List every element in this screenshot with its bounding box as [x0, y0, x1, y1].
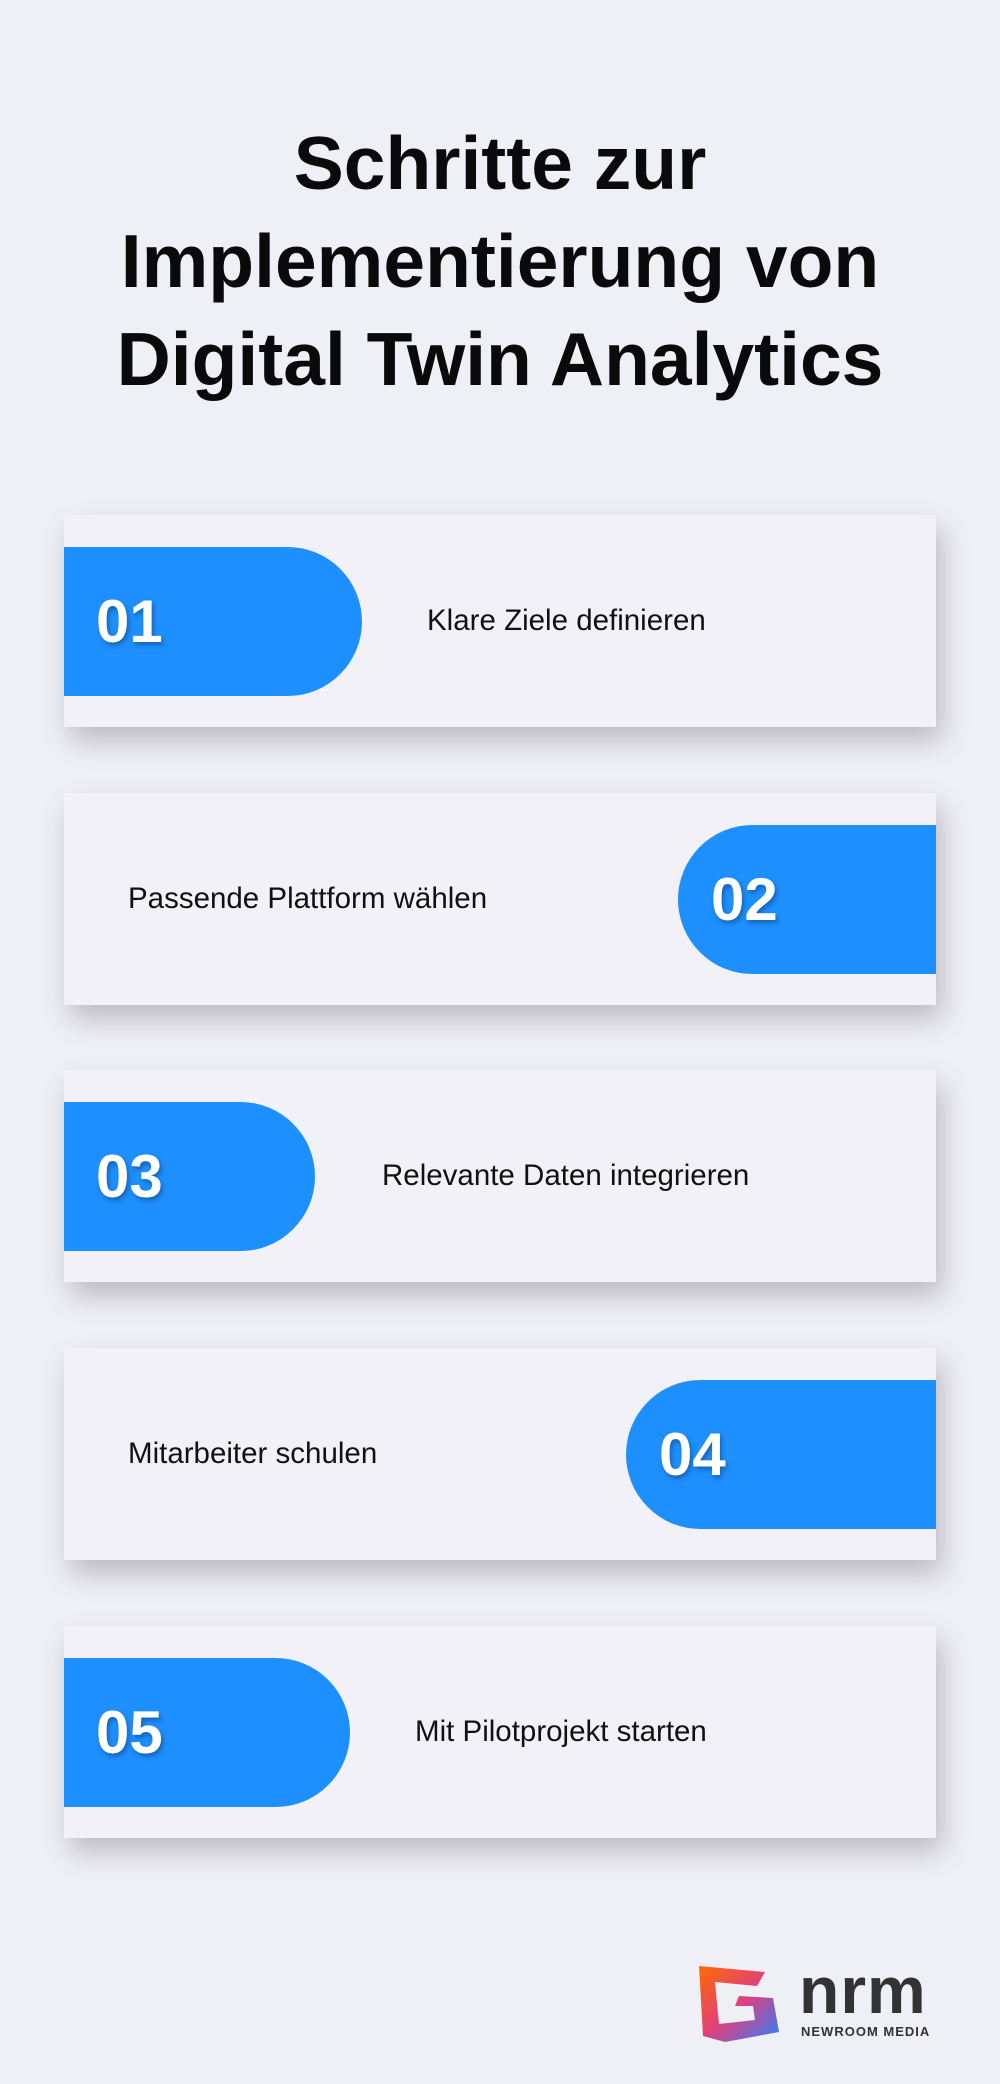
text 02: Passende Plattform wählen [128, 882, 487, 915]
pill 02 [678, 825, 936, 974]
card: step 03 [64, 1070, 936, 1282]
pill 05: 05 [96, 1699, 163, 1766]
logo text: nrm [799, 1953, 927, 2027]
text 03: Relevante Daten integrieren [382, 1159, 749, 1192]
text 05: Mit Pilotprojekt starten [415, 1715, 707, 1748]
pill 04 [626, 1380, 936, 1529]
pill 01: 01 [96, 588, 163, 655]
text 01: Klare Ziele definieren [427, 604, 706, 637]
card: step 04 [64, 1348, 936, 1560]
pill 04: 04 [659, 1421, 726, 1488]
logo [699, 1953, 930, 2042]
card: step 02 [64, 793, 936, 1005]
pill 01 [64, 547, 362, 696]
title: Digital Twin Analytics [117, 317, 883, 401]
pill 05 [64, 1658, 350, 1807]
pill 02: 02 [711, 866, 778, 933]
card: step 01 [64, 515, 936, 727]
icon: logo mark [699, 1966, 779, 2042]
title: Schritte zur [294, 121, 706, 205]
pill 03 [64, 1102, 315, 1251]
title [117, 121, 883, 401]
card: step 05 [64, 1626, 936, 1838]
text 04: Mitarbeiter schulen [128, 1437, 377, 1470]
logo: NEWROOM MEDIA [801, 2024, 930, 2039]
pill 03: 03 [96, 1143, 163, 1210]
title: Implementierung von [121, 219, 879, 303]
